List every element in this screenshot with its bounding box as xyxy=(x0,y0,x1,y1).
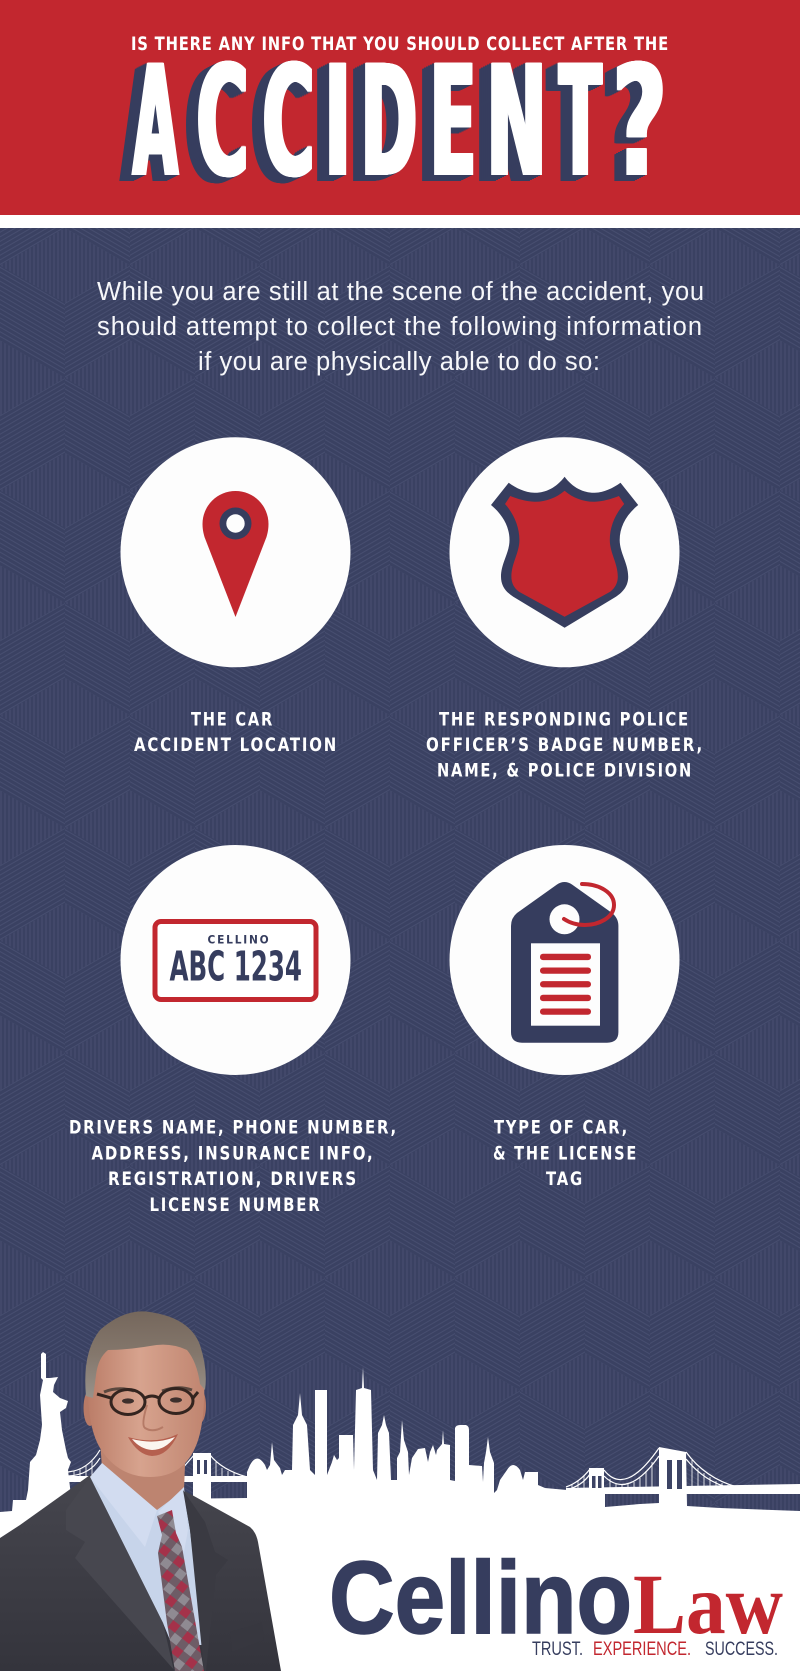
title: ACCIDENT?: E xyxy=(428,34,474,213)
label: THE RESPONDING POLICE xyxy=(439,709,690,730)
tagline xyxy=(532,1639,778,1660)
title: ACCIDENT?: C xyxy=(260,34,312,212)
icon: map pin xyxy=(202,491,268,617)
panel: police officer badge xyxy=(426,437,704,782)
tagline: SUCCESS. xyxy=(705,1639,778,1660)
label xyxy=(426,709,704,782)
ears xyxy=(84,1390,96,1426)
label: OFFICER’S BADGE NUMBER, xyxy=(426,735,704,756)
panel: drivers details xyxy=(69,845,398,1216)
smile xyxy=(128,1434,178,1456)
title: ACCIDENT?: N xyxy=(485,34,545,212)
hair xyxy=(85,1311,206,1398)
pocket xyxy=(230,1622,264,1652)
label xyxy=(493,1117,638,1190)
title: ACCIDENT?: D xyxy=(359,34,415,213)
tagline: EXPERIENCE. xyxy=(593,1639,691,1660)
icon: license plate: CELLINO xyxy=(208,932,270,946)
label: TAG xyxy=(546,1169,584,1190)
eyes xyxy=(122,1398,134,1404)
panel: car accident location xyxy=(120,437,350,756)
icon: police badge xyxy=(491,477,638,628)
label: NAME, & POLICE DIVISION xyxy=(437,761,693,782)
nose xyxy=(143,1405,163,1430)
face xyxy=(88,1335,204,1477)
text block: intro: should attempt to collect the following information xyxy=(97,313,702,341)
heading: subtitle: IS THERE ANY INFO THAT YOU SHOULD COLLECT AFTER THE xyxy=(131,34,669,55)
collar xyxy=(90,1463,157,1547)
label: ADDRESS, INSURANCE INFO, xyxy=(92,1143,374,1164)
title: ACCIDENT? xyxy=(131,32,665,213)
jacket xyxy=(0,1475,281,1671)
label: THE CAR xyxy=(191,709,274,730)
label: TYPE OF CAR, xyxy=(494,1117,629,1138)
logo: Cellino Law: Law xyxy=(633,1556,783,1652)
eyebrows xyxy=(104,1389,134,1392)
glasses xyxy=(97,1388,198,1414)
panel: red header xyxy=(0,0,800,215)
title: ACCIDENT?: ? xyxy=(610,34,665,212)
text block: intro: While you are still at the scene of the accident, you xyxy=(97,278,704,306)
label: ACCIDENT LOCATION xyxy=(134,735,338,756)
skyline silhouette xyxy=(0,1352,800,1671)
title: ACCIDENT?: A xyxy=(131,33,176,212)
tagline: TRUST. xyxy=(532,1639,583,1660)
label xyxy=(134,709,338,756)
title: ACCIDENT?: I xyxy=(323,33,349,212)
shirt xyxy=(90,1465,204,1645)
text block: intro xyxy=(97,278,704,376)
lapels xyxy=(66,1477,175,1671)
label: & THE LICENSE xyxy=(493,1143,638,1164)
photo: attorney portrait xyxy=(0,1311,281,1671)
tie xyxy=(157,1510,204,1671)
title: ACCIDENT?: C xyxy=(194,34,246,212)
label: DRIVERS NAME, PHONE NUMBER, xyxy=(69,1117,398,1138)
logo: Cellino Law: Cellino xyxy=(329,1540,632,1655)
icon: license plate: ABC 1234 xyxy=(170,943,302,991)
text block: intro: if you are physically able to do so: xyxy=(198,348,600,376)
title: ACCIDENT?: T xyxy=(557,32,599,212)
label xyxy=(69,1117,398,1216)
neck xyxy=(100,1440,186,1510)
label: REGISTRATION, DRIVERS xyxy=(108,1169,358,1190)
icon: tag xyxy=(511,882,618,1043)
panel: type of car and license tag xyxy=(450,845,680,1190)
label: LICENSE NUMBER xyxy=(150,1195,322,1216)
icon: license plate xyxy=(155,922,316,1000)
